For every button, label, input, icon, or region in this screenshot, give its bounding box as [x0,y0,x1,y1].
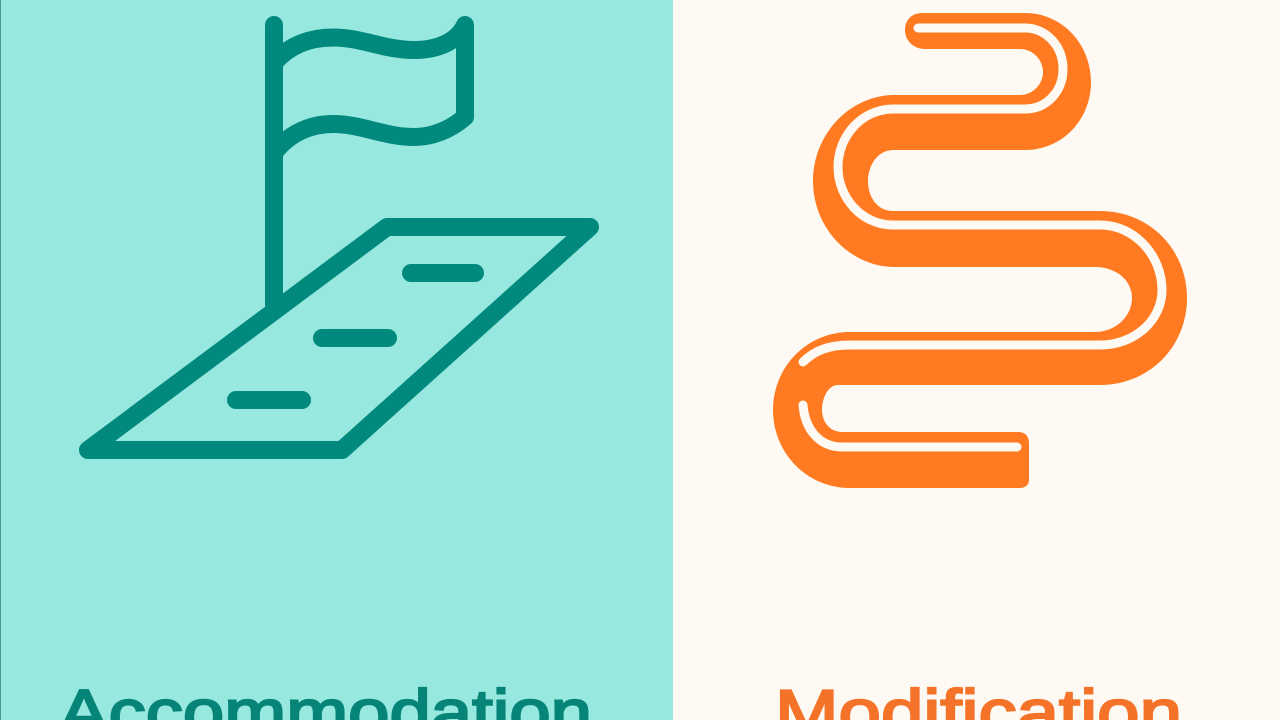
icon: flag on a marked parallelogram path [88,25,590,450]
panel: modification content [773,13,1187,720]
flag pole top cap [265,25,283,26]
panel: modification background [673,0,1280,720]
icon: winding orange road [773,13,1187,488]
flag pole [265,25,283,306]
road highlight: lower [803,405,1017,447]
road highlight: upper [803,28,1162,362]
dash: lower [236,391,302,409]
dash: upper [411,264,475,282]
dash: middle [322,329,388,347]
panel: accommodation [0,0,673,720]
road shape [773,13,1187,488]
parallelogram ground [88,227,590,450]
flag cloth [274,25,465,153]
